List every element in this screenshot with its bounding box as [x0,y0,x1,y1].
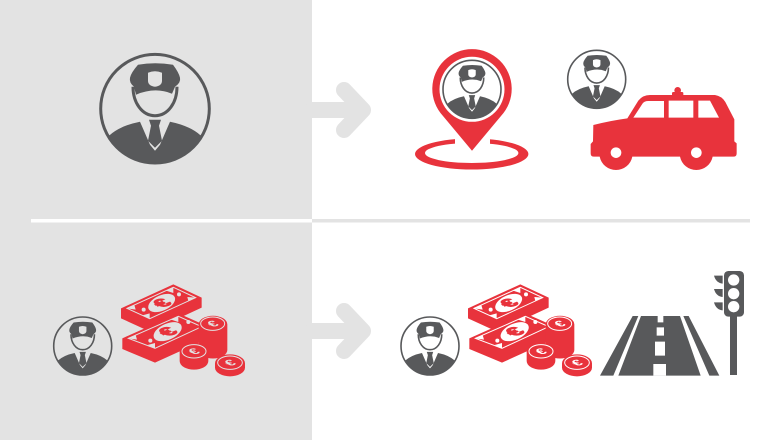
icon: small officer beside car [568,50,626,108]
icon: large officer portrait [101,54,209,163]
pin body [432,49,512,151]
panel: grey left column [0,0,312,440]
pin inner disc [440,57,504,122]
icon: traffic light [714,271,744,375]
icon: officer bottom right [401,317,459,375]
icon: map pin with officer [415,49,528,169]
officer inside pin [443,60,501,118]
arrow: bottom [312,311,363,351]
gap in ring [455,132,490,152]
icon: road [600,316,719,376]
divider: left white segment [31,219,312,222]
icon: officer bottom left [54,317,112,375]
icon: euro money left [121,284,245,376]
arrow: top [312,90,363,130]
icon: red car [591,87,737,170]
icon: location ring [415,138,528,169]
icon: euro money right [468,284,592,376]
divider: right grey segment [312,219,750,222]
